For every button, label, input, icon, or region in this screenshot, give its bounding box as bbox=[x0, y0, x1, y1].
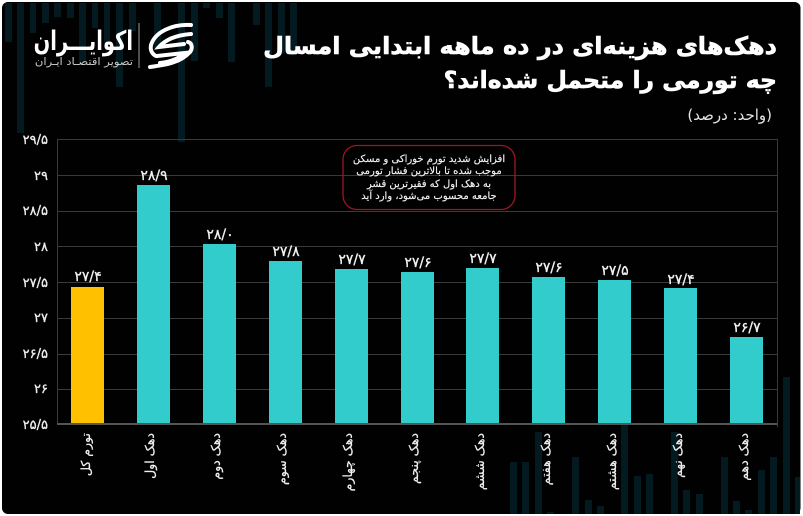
value labels: ۲۷/۶ bbox=[535, 260, 563, 276]
value labels: ۲۷/۴ bbox=[667, 272, 695, 288]
title: چه تورمی را متحمل شده‌اند؟ bbox=[444, 66, 777, 94]
value labels: ۲۷/۴ bbox=[74, 269, 102, 285]
category labels: دهک پنجم bbox=[406, 433, 422, 484]
value labels: ۲۸/۹ bbox=[140, 168, 168, 184]
value labels: ۲۷/۵ bbox=[601, 263, 629, 279]
callout: موجب شده تا بالاترین فشار تورمی bbox=[356, 166, 502, 177]
category labels: دهک دهم bbox=[736, 433, 752, 481]
value labels: ۲۷/۶ bbox=[404, 255, 432, 271]
value labels bbox=[74, 168, 761, 336]
category labels: دهک هفتم bbox=[538, 433, 554, 485]
callout: به دهک اول که فقیرترین قشر bbox=[366, 179, 491, 190]
logo icon bbox=[150, 25, 192, 67]
y axis labels: ۲۵/۵ bbox=[23, 418, 48, 433]
title bbox=[263, 32, 777, 94]
logo tagline: تصویر اقتصـاد ایـران bbox=[35, 55, 133, 68]
gridlines bbox=[57, 139, 778, 427]
value labels: ۲۷/۷ bbox=[469, 251, 497, 267]
category labels: دهک اول bbox=[142, 433, 158, 479]
y axis labels: ۲۶/۵ bbox=[23, 347, 48, 362]
deciles bars bbox=[137, 185, 763, 423]
value labels: ۲۶/۷ bbox=[733, 320, 761, 336]
value labels: ۲۸/۰ bbox=[206, 227, 234, 243]
category labels: دهک چهارم bbox=[340, 433, 356, 491]
category labels: دهک هشتم bbox=[604, 433, 620, 490]
logo divider bbox=[138, 23, 140, 68]
category labels: دهک سوم bbox=[274, 433, 290, 485]
unit note: (واحد: درصد) bbox=[687, 106, 772, 124]
category labels: دهک نهم bbox=[670, 433, 686, 478]
callout: جامعه محسوب می‌شود، وارد آید bbox=[361, 189, 497, 202]
y axis labels: ۲۹/۵ bbox=[23, 133, 48, 148]
y axis labels: ۲۷/۵ bbox=[23, 276, 48, 291]
logo bbox=[34, 23, 192, 68]
y axis labels: ۲۶ bbox=[34, 382, 48, 397]
category labels: دهک دوم bbox=[208, 433, 224, 480]
value labels: ۲۷/۸ bbox=[272, 244, 300, 260]
y axis labels: ۲۸/۵ bbox=[23, 204, 48, 219]
y axis labels: ۲۷ bbox=[34, 311, 48, 326]
x axis line bbox=[57, 423, 777, 425]
category labels bbox=[78, 432, 752, 491]
title: دهک‌های هزینه‌ای در ده ماهه ابتدایی امسال bbox=[263, 32, 777, 60]
bar: total inflation bbox=[71, 287, 104, 423]
value labels: ۲۷/۷ bbox=[338, 252, 366, 268]
callout: افزایش شدید تورم خوراکی و مسکن bbox=[353, 154, 505, 165]
category labels: دهک ششم bbox=[472, 433, 488, 490]
y axis labels: ۲۹ bbox=[34, 169, 48, 184]
bar chart bbox=[71, 185, 763, 423]
category labels: تورم کل bbox=[78, 432, 94, 476]
y axis labels: ۲۸ bbox=[34, 240, 48, 255]
y axis labels bbox=[23, 133, 48, 433]
callout bbox=[343, 146, 515, 210]
logo wordmark: اکوایـــران bbox=[34, 25, 133, 57]
